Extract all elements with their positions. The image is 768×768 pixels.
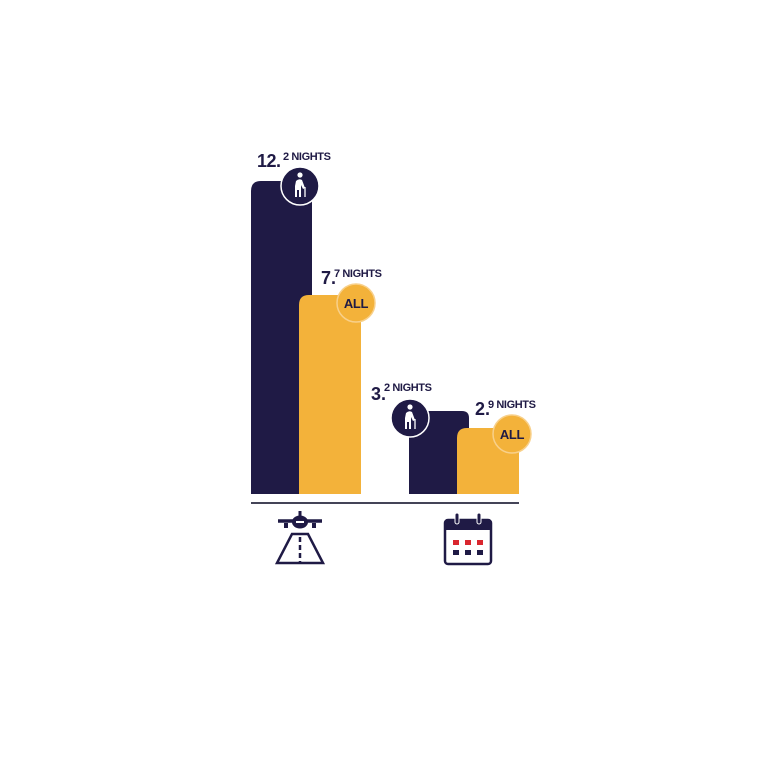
label: 12.2 nights: 2 NIGHTS — [283, 151, 331, 163]
bar: flights all — [299, 295, 361, 494]
label: 2.9 nights: 2. — [475, 399, 490, 419]
label: 2.9 nights: 9 NIGHTS — [488, 399, 536, 411]
label: 7.7 nights — [321, 268, 382, 288]
label: 7.7 nights: 7 NIGHTS — [334, 268, 382, 280]
icon: all badge 1 — [337, 284, 375, 322]
icon: plane on runway — [277, 511, 323, 563]
bar: flights seniors — [251, 181, 312, 494]
bar: stays all — [457, 428, 519, 494]
label: 2.9 nights — [475, 399, 536, 419]
icon: senior badge 1 — [281, 167, 319, 205]
icon: all badge 2 — [493, 415, 531, 453]
icon: all badge 2: ALL — [500, 427, 525, 442]
label: 3.2 nights: 3. — [371, 384, 386, 404]
label: 3.2 nights: 2 NIGHTS — [384, 382, 432, 394]
label: 12.2 nights: 12. — [257, 151, 281, 171]
icon: all badge 1: ALL — [344, 296, 369, 311]
bar: stays seniors — [409, 411, 469, 494]
label: 7.7 nights: 7. — [321, 268, 336, 288]
label: 3.2 nights — [371, 382, 432, 404]
icon: calendar — [445, 513, 491, 564]
icon: senior badge 2 — [391, 399, 429, 437]
label: 12.2 nights — [257, 151, 331, 171]
